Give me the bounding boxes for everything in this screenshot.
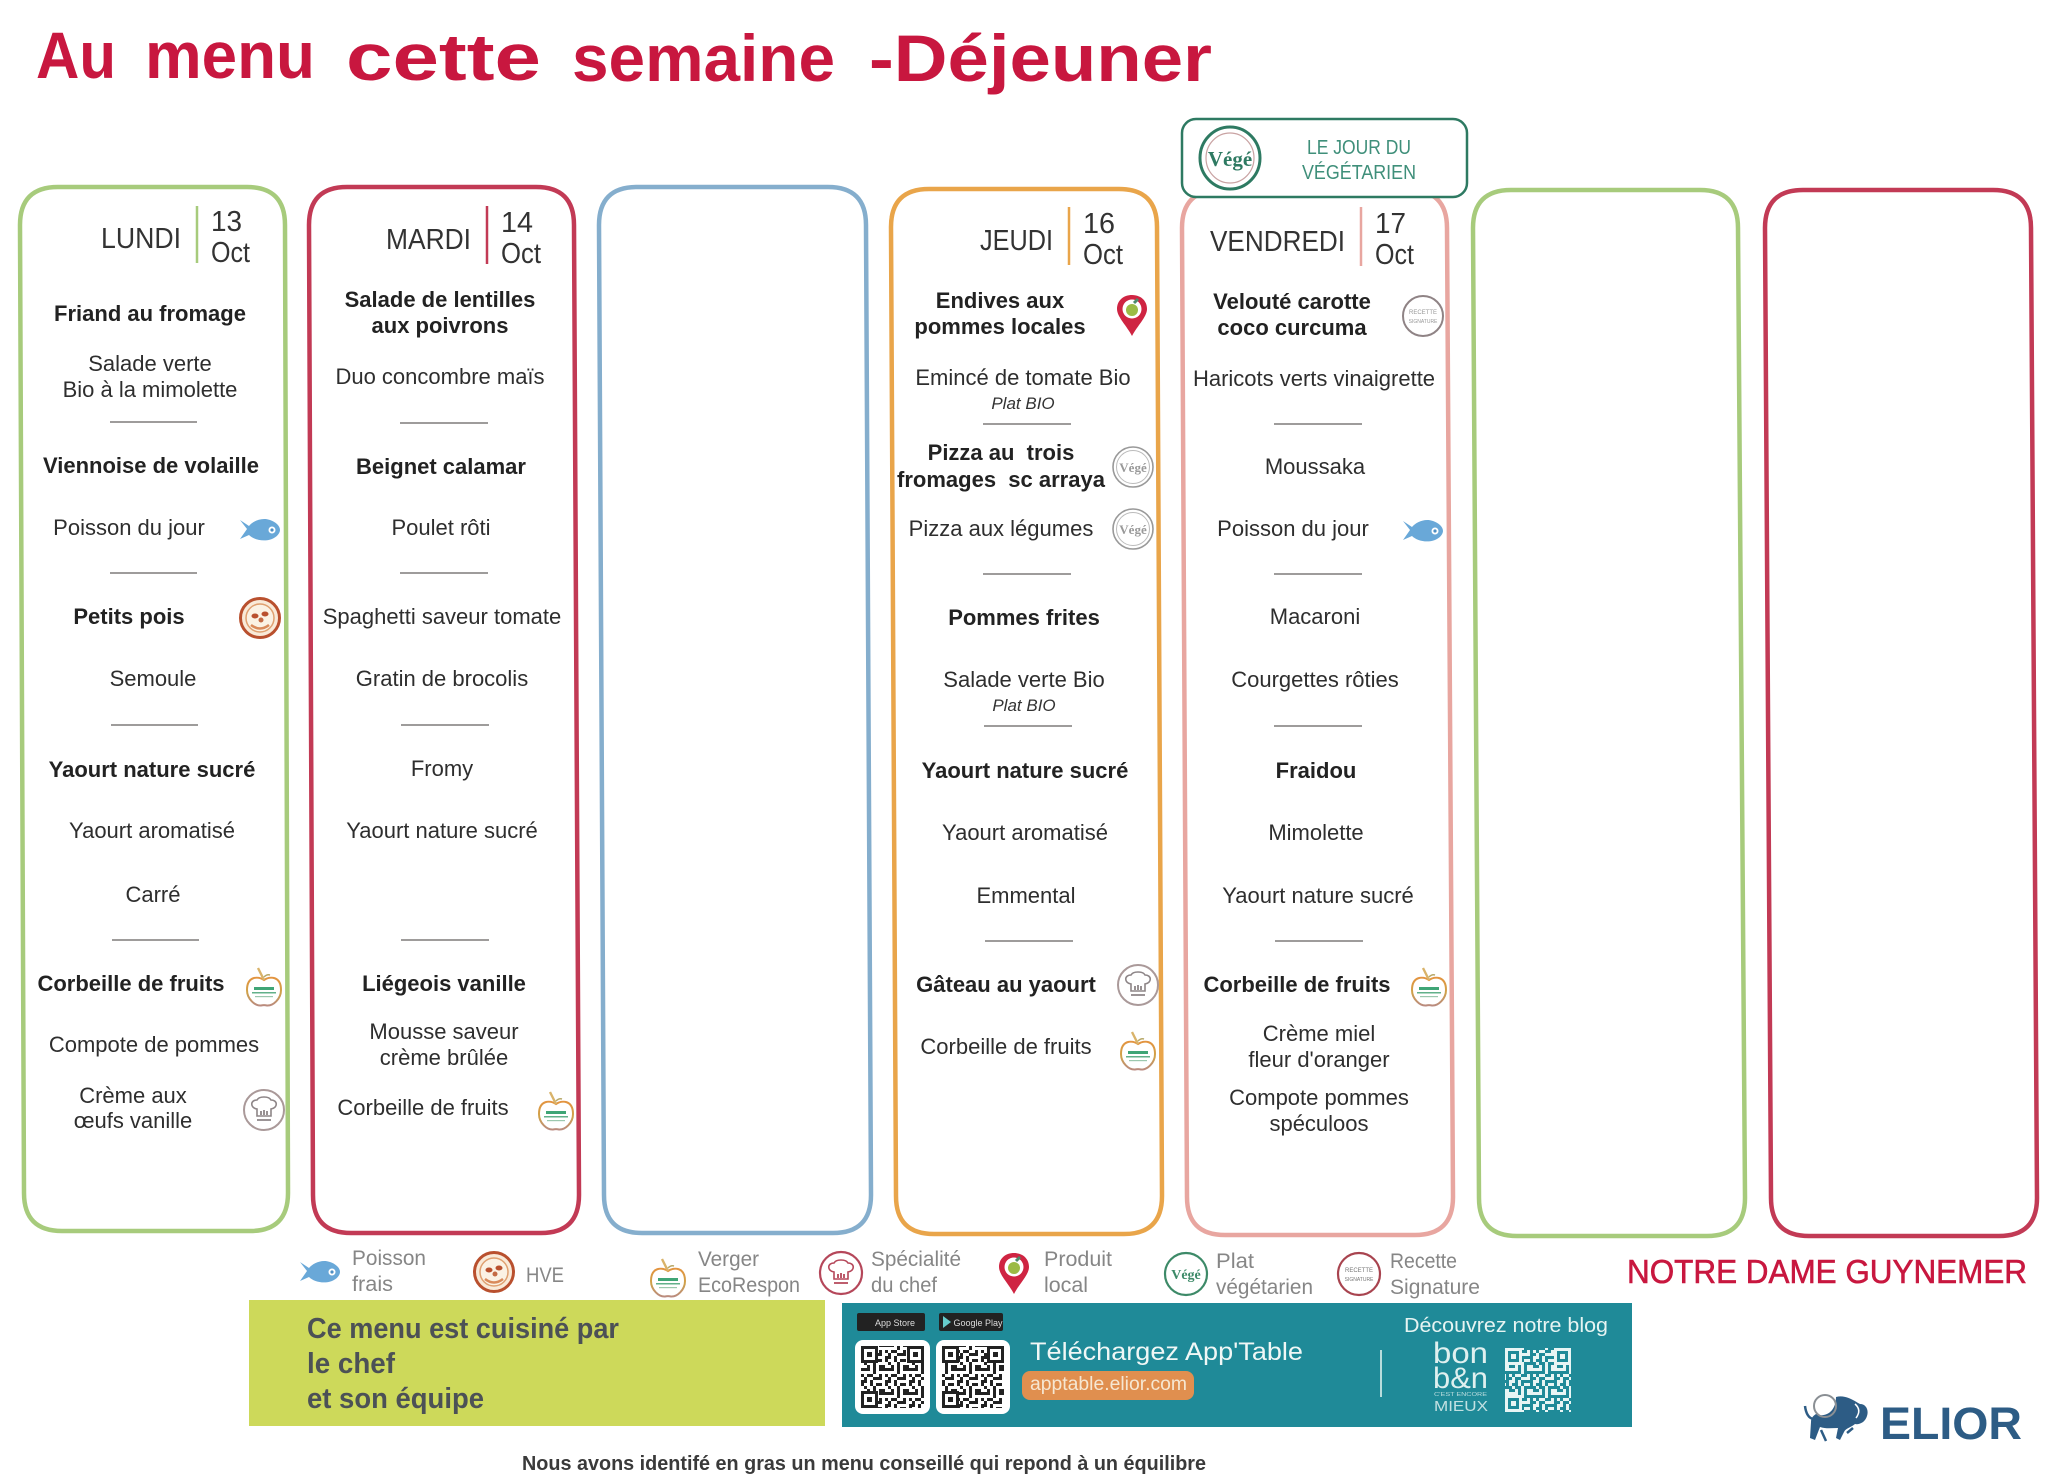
icon: HVE [240, 598, 280, 638]
title [36, 18, 1212, 95]
badge: le jour du végétarien: Végé [1208, 147, 1252, 171]
side option: Plat BIO [992, 696, 1056, 715]
starter: Friand au fromage [54, 301, 246, 326]
icon: recette signature [1403, 296, 1443, 336]
legend: verger écoresponsable: Verger [698, 1248, 759, 1271]
main option: Pizza aux légumes [909, 516, 1093, 541]
dessert option: Crème aux [79, 1083, 187, 1108]
heading: vendredi 17 Oct: VENDREDI [1210, 226, 1345, 258]
main dish: fromages sc arraya [897, 467, 1106, 492]
icon: pin [1117, 295, 1147, 336]
QR code: blog [1505, 1348, 1571, 1412]
panel: chef note: le chef [307, 1348, 395, 1380]
icon: recette signature: SIGNATURE [1409, 319, 1438, 325]
starter option: Emincé de tomate Bio [915, 365, 1131, 390]
icon: fish [1403, 520, 1443, 541]
dairy option: Yaourt nature sucré [346, 818, 538, 843]
legend [300, 1247, 1480, 1299]
icon: vege [1113, 509, 1153, 549]
heading: lundi 13 Oct: LUNDI [101, 223, 181, 255]
legend: recette signature: Recette [1390, 1250, 1457, 1273]
panel: vendredi [1182, 190, 1453, 1235]
icon: chef [244, 1090, 284, 1130]
icon: apple [539, 1092, 573, 1130]
heading: lundi 13 Oct: 13 [211, 206, 242, 238]
icon: recette signature: RECETTE [1409, 310, 1437, 316]
side dish: Pommes frites [948, 605, 1100, 630]
legend: spécialité du chef [820, 1248, 961, 1297]
starter option: Salade verte [88, 351, 212, 376]
title: Au [36, 18, 116, 92]
legend: plat végétarien: Végé [1171, 1268, 1201, 1283]
dairy option: Yaourt aromatisé [942, 820, 1108, 845]
title: menu [145, 18, 315, 92]
icon: bull [1805, 1395, 1868, 1441]
dairy: Yaourt nature sucré [922, 758, 1128, 783]
logo: bon & bon: MIEUX [1434, 1398, 1488, 1415]
legend: plat végétarien: Plat [1216, 1250, 1254, 1273]
dessert option: crème brûlée [380, 1045, 508, 1070]
dessert option [1229, 1085, 1409, 1136]
store badge: google play [939, 1313, 1003, 1331]
badge: le jour du végétarien [1182, 119, 1467, 197]
starter option: Duo concombre maïs [335, 364, 545, 389]
main option: Poisson du jour [53, 515, 205, 540]
heading: lundi 13 Oct [101, 206, 250, 269]
starter: Salade de lentilles [345, 287, 535, 312]
starter [914, 288, 1086, 339]
main dish: Moussaka [1265, 454, 1366, 479]
dairy: Yaourt nature sucré [49, 757, 255, 782]
store badge: app store: App Store [875, 1318, 915, 1328]
starter: pommes locales [914, 314, 1086, 339]
panel: jeudi [891, 189, 1162, 1234]
dessert: Liégeois vanille [362, 971, 526, 996]
main option: Poulet rôti [391, 515, 491, 540]
starter option: Bio à la mimolette [63, 377, 237, 402]
main option: Poisson du jour [1217, 516, 1369, 541]
starter [345, 287, 535, 338]
dairy option: Emmental [976, 883, 1076, 908]
icon: vege [1113, 447, 1153, 487]
legend: recette signature: SIGNATURE [1345, 1277, 1374, 1283]
side dish: Petits pois [73, 604, 185, 629]
main dish: Viennoise de volaille [43, 453, 259, 478]
legend: poisson frais: frais [352, 1273, 393, 1296]
logo: bon & bon [1433, 1337, 1488, 1415]
logo wordmark: ELIOR [1880, 1398, 2022, 1449]
legend: verger écoresponsable [651, 1248, 800, 1297]
legend: recette signature: Signature [1390, 1276, 1480, 1299]
main dish: Beignet calamar [356, 454, 526, 479]
legend: recette signature [1338, 1250, 1480, 1299]
starter: aux poivrons [372, 313, 508, 338]
dessert: Gâteau au yaourt [916, 972, 1097, 997]
side option: Salade verte Bio [943, 667, 1105, 692]
icon: vege: Végé [1119, 522, 1147, 537]
heading: jeudi 16 Oct: JEUDI [980, 225, 1053, 257]
dessert option: fleur d'oranger [1248, 1047, 1390, 1072]
starter option [63, 351, 237, 402]
panel: empty red [1765, 190, 2037, 1236]
starter option: Plat BIO [991, 394, 1055, 413]
dessert option: Corbeille de fruits [337, 1095, 509, 1120]
footnote: Nous avons identifé en gras un menu conseillé qui repond à un équilibre [522, 1453, 1206, 1475]
legend: produit local: local [1044, 1274, 1088, 1297]
heading: mardi 14 Oct: Oct [501, 238, 541, 270]
store badge: app store [857, 1313, 925, 1331]
side option: Semoule [110, 666, 196, 691]
dairy: Fromy [411, 756, 473, 781]
main dish [897, 440, 1106, 492]
legend: HVE [474, 1252, 564, 1292]
starter option: Haricots verts vinaigrette [1193, 366, 1435, 391]
dairy: Fraidou [1276, 758, 1356, 783]
side option [943, 667, 1105, 715]
app heading: Téléchargez App'Table [1030, 1338, 1303, 1366]
heading: vendredi 17 Oct: Oct [1375, 239, 1414, 271]
dessert option: Crème miel [1263, 1021, 1375, 1046]
legend: plat végétarien [1165, 1250, 1313, 1299]
legend: produit local: Produit [1044, 1248, 1112, 1271]
starter: coco curcuma [1217, 315, 1367, 340]
side option: Courgettes rôties [1231, 667, 1399, 692]
legend: poisson frais: Poisson [352, 1247, 426, 1270]
legend: spécialité du chef: Spécialité [871, 1248, 961, 1271]
dessert option: œufs vanille [74, 1108, 192, 1133]
dessert option: Mousse saveur [369, 1019, 519, 1044]
dessert option [1248, 1021, 1390, 1072]
panel: empty green [1473, 190, 1745, 1236]
title: -Déjeuner [869, 21, 1212, 95]
legend: poisson frais [300, 1247, 426, 1296]
heading: vendredi 17 Oct: 17 [1375, 208, 1406, 240]
heading: lundi 13 Oct: Oct [211, 237, 250, 269]
heading: mardi 14 Oct [386, 206, 541, 270]
legend: HVE: HVE [526, 1264, 564, 1287]
side dish: Macaroni [1270, 604, 1360, 629]
heading: mardi 14 Oct: 14 [501, 207, 533, 239]
icon: apple [1121, 1032, 1155, 1070]
store badge: google play: Google Play [953, 1318, 1003, 1328]
logo: bon & bon: C'EST ENCORE [1434, 1392, 1488, 1398]
legend: plat végétarien: végétarien [1216, 1276, 1313, 1299]
panel: app banner [842, 1303, 1632, 1427]
app URL pill [1022, 1371, 1194, 1400]
legend: verger écoresponsable: EcoRespon [698, 1274, 800, 1297]
dairy option: Yaourt aromatisé [69, 818, 235, 843]
heading: mardi 14 Oct: MARDI [386, 224, 471, 256]
QR code: google play [936, 1340, 1010, 1414]
dairy option: Mimolette [1268, 820, 1364, 845]
blog heading: Découvrez notre blog [1404, 1315, 1608, 1337]
heading: jeudi 16 Oct: 16 [1083, 208, 1115, 240]
logo: Elior [1805, 1395, 2022, 1449]
panel: empty blue [599, 187, 871, 1233]
legend: spécialité du chef: du chef [871, 1274, 937, 1297]
panel: chef note: et son équipe [307, 1383, 484, 1415]
dessert option: Compote pommes [1229, 1085, 1409, 1110]
icon: vege: Végé [1119, 460, 1147, 475]
title: cette [346, 20, 541, 94]
panel: mardi [309, 187, 579, 1233]
icon: chef [1118, 965, 1158, 1005]
side option: Gratin de brocolis [356, 666, 528, 691]
panel: chef note [249, 1300, 825, 1426]
icon: apple [247, 968, 281, 1006]
heading: vendredi 17 Oct [1210, 207, 1414, 271]
heading: jeudi 16 Oct [980, 207, 1123, 271]
dessert: Corbeille de fruits [37, 971, 225, 996]
starter [1213, 289, 1371, 340]
app URL pill: apptable.elior.com [1030, 1374, 1187, 1395]
side dish: Spaghetti saveur tomate [323, 604, 561, 629]
panel: lundi [20, 187, 288, 1231]
starter option [915, 365, 1131, 413]
dessert option [369, 1019, 519, 1070]
icon: fish [240, 519, 280, 540]
logo: bon & bon: bon [1433, 1337, 1488, 1370]
heading: jeudi 16 Oct: Oct [1083, 239, 1123, 271]
site name: NOTRE DAME GUYNEMER [1627, 1253, 2027, 1290]
legend: recette signature: RECETTE [1345, 1268, 1373, 1274]
starter: Velouté carotte [1213, 289, 1371, 314]
badge: le jour du végétarien: LE JOUR DU [1307, 137, 1411, 159]
dairy option: Carré [125, 882, 181, 907]
starter: Endives aux [936, 288, 1065, 313]
logo: bon & bon: b&n [1433, 1362, 1488, 1395]
dessert: Corbeille de fruits [1203, 972, 1391, 997]
icon: apple [1412, 968, 1446, 1006]
QR code: app store [855, 1340, 930, 1414]
dessert option: Compote de pommes [49, 1032, 259, 1057]
badge: le jour du végétarien: VÉGÉTARIEN [1302, 161, 1416, 184]
dessert option: Corbeille de fruits [920, 1034, 1092, 1059]
dairy option: Yaourt nature sucré [1222, 883, 1414, 908]
title: semaine [572, 21, 835, 95]
panel: chef note: Ce menu est cuisiné par [307, 1313, 619, 1345]
main dish: Pizza au trois [928, 440, 1074, 465]
dessert option [74, 1083, 192, 1133]
legend: produit local [999, 1248, 1112, 1297]
dessert option: spéculoos [1269, 1111, 1369, 1136]
